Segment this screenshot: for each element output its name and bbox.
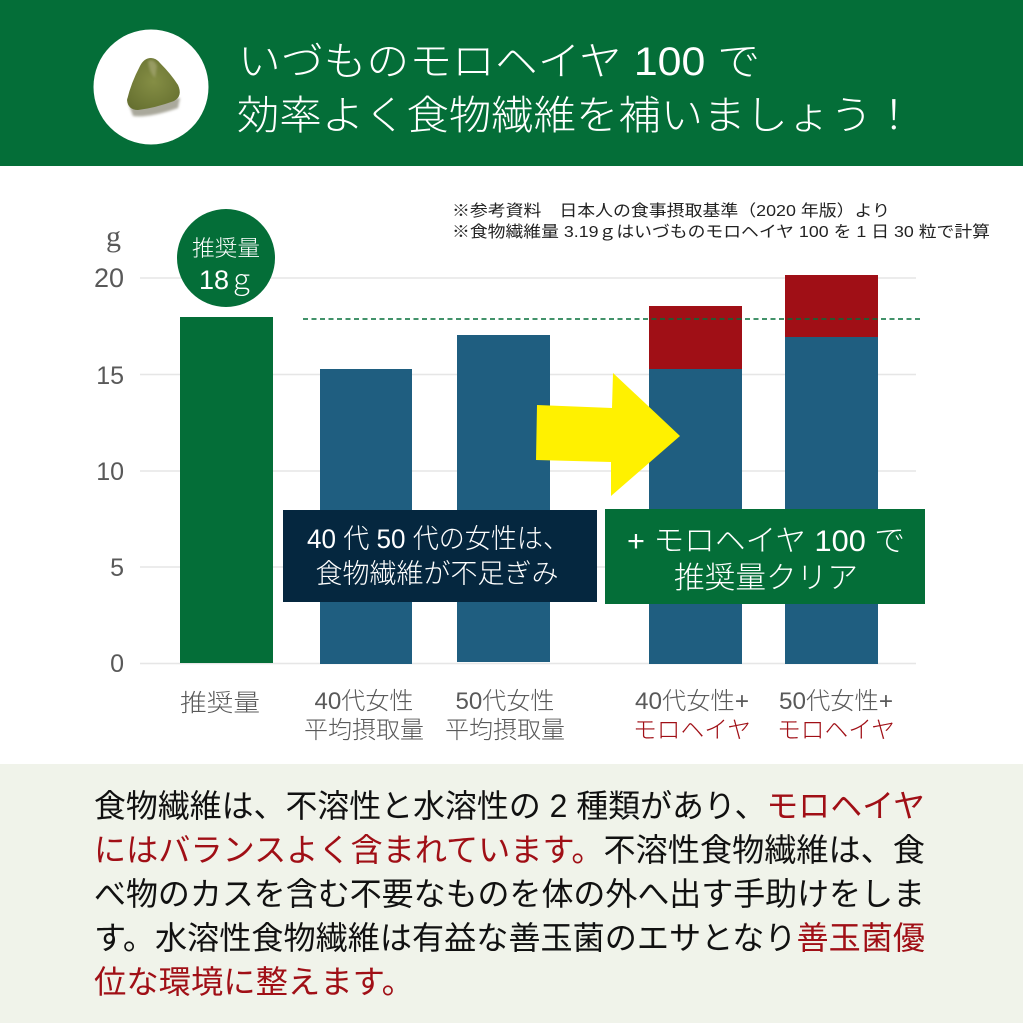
badge: recommended 18 g: 推奨量 — [192, 236, 260, 261]
x axis labels: 平均摂取量 — [445, 717, 565, 744]
bar: 50s average — [457, 335, 550, 662]
badge: recommended 18 g: 18 — [199, 265, 229, 295]
explanation text: べ物のカスを含む不要なものを体の外へ出す手助けをしま — [94, 876, 925, 912]
y axis labels: 10 — [96, 458, 124, 486]
y axis labels: 0 — [110, 650, 124, 678]
x axis labels: 50代女性+ — [779, 688, 893, 715]
x axis labels: 50代女性 — [456, 688, 554, 715]
callout: shortage: 40 代 50 代の女性は、 — [307, 524, 569, 554]
explanation panel — [0, 764, 1023, 1023]
title: 効率よく食物繊維を補いましょう！ — [237, 94, 915, 138]
stacked bar: 50s plus moroheiya — [785, 275, 878, 664]
title — [237, 40, 915, 138]
callout: shortage — [283, 510, 597, 602]
badge: recommended 18 g: ｇ — [228, 265, 255, 296]
icon: moroheiya tablet — [94, 30, 208, 144]
badge: recommended 18 g — [177, 209, 275, 307]
explanation text — [94, 788, 925, 1000]
bar chart — [94, 220, 920, 744]
explanation text: す。水溶性食物繊維は有益な善玉菌のエサとなり善玉菌優 — [94, 920, 925, 956]
x axis labels: 40代女性+ — [635, 688, 749, 715]
x axis labels: モロヘイヤ — [633, 717, 751, 744]
title: いづものモロヘイヤ 100 で — [238, 40, 760, 84]
callout: cleared: + モロヘイヤ 100 で — [627, 525, 905, 558]
callout: cleared: 推奨量クリア — [674, 562, 858, 595]
y axis labels: 5 — [110, 554, 124, 582]
explanation text: 食物繊維は、不溶性と水溶性の 2 種類があり、モロヘイヤ — [94, 788, 925, 824]
x axis labels — [180, 688, 895, 744]
y axis labels: 15 — [96, 362, 124, 390]
x axis labels: 推奨量 — [180, 690, 260, 717]
explanation text: 位な環境に整えます。 — [94, 964, 414, 1000]
callout: shortage: 食物繊維が不足ぎみ — [316, 559, 558, 589]
x axis labels: 平均摂取量 — [304, 717, 424, 744]
source notes: ※食物繊維量 3.19ｇはいづものモロヘイヤ 100 を 1 日 30 粒で計算 — [452, 222, 990, 241]
callout: cleared — [605, 509, 925, 604]
source notes: ※参考資料 日本人の食事摂取基準（2020 年版）より — [452, 202, 890, 220]
recommended level line — [303, 318, 920, 320]
header band — [0, 0, 1023, 166]
explanation text: にはバランスよく含まれています。不溶性食物繊維は、食 — [94, 832, 925, 868]
x axis labels: 40代女性 — [314, 688, 414, 715]
y axis labels: g — [106, 220, 121, 253]
x axis labels: モロヘイヤ — [777, 717, 895, 744]
stacked bar: 40s plus moroheiya — [649, 306, 742, 664]
y axis labels: 20 — [94, 263, 124, 293]
source notes — [452, 202, 990, 241]
bar: 40s average — [320, 369, 412, 664]
bar: recommended — [180, 317, 273, 663]
arrow — [536, 373, 680, 496]
y axis labels — [94, 220, 124, 678]
